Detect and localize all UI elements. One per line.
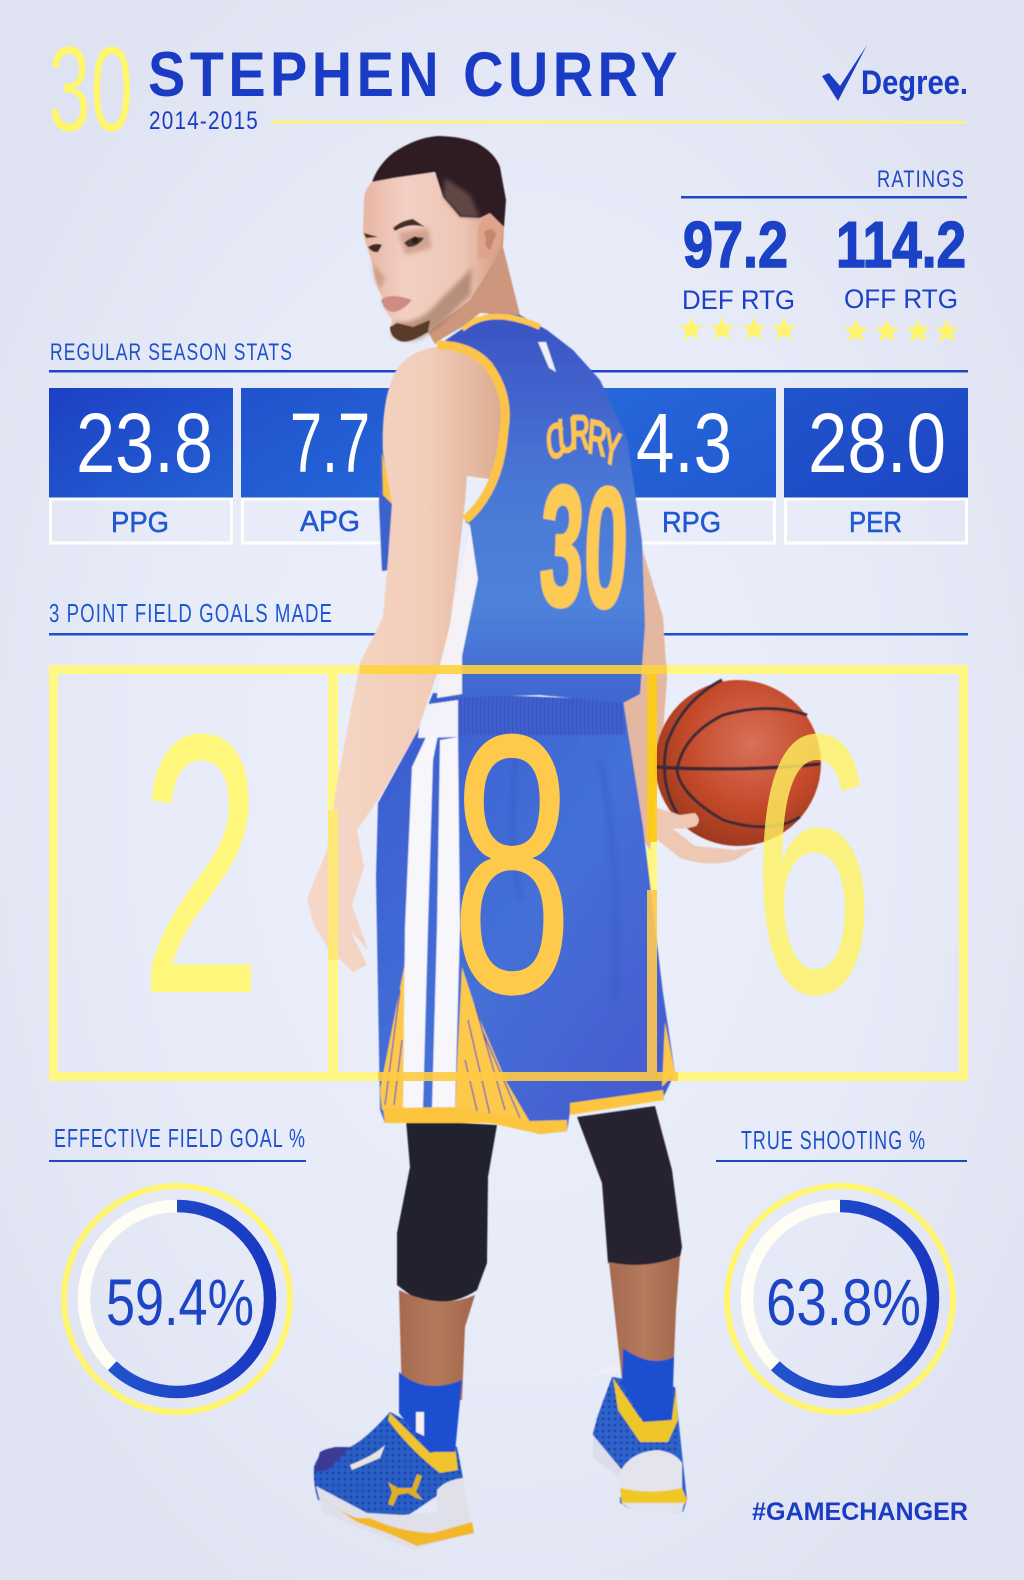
panel: ratings (679, 166, 967, 342)
stat: PPG (49, 388, 233, 543)
front shoe (314, 1412, 474, 1550)
lips (381, 296, 412, 312)
jersey number 30: 30 (48, 21, 133, 157)
title block (51, 46, 966, 132)
panel: regular season stats (49, 339, 968, 543)
player photo illustration (307, 136, 821, 1550)
hand on ball (655, 808, 757, 864)
ear (478, 213, 503, 260)
stat: APG: APG (300, 506, 360, 538)
front calf (399, 1290, 475, 1400)
logo: Degree (822, 45, 968, 102)
value: 59.4% (106, 1265, 254, 1339)
icon: league logo (538, 342, 556, 372)
head (363, 136, 506, 342)
ring chart (64, 1186, 290, 1412)
back sock (622, 1348, 674, 1422)
stat: PPG: PPG (111, 507, 169, 539)
hair (372, 136, 506, 227)
heading: TRUE SHOOTING % (741, 1125, 926, 1155)
stat: RPG: 4.3 (636, 396, 732, 490)
jaw stubble (392, 268, 472, 341)
panel: 3 point field goals made (49, 598, 968, 1081)
stat: PPG: 23.8 (76, 396, 213, 490)
armhole trim (437, 345, 505, 520)
ratings heading: RATINGS (877, 166, 965, 193)
jersey (379, 311, 645, 703)
panel: effective field goal (49, 1123, 306, 1412)
section heading: 3 POINT FIELD GOALS MADE (49, 598, 333, 628)
player name: STEPHEN CURRY (148, 40, 682, 110)
stat: RPG (592, 388, 776, 543)
defensive stars (679, 317, 796, 340)
defensive rating label: DEF RTG (682, 285, 795, 315)
arm (307, 347, 508, 972)
stat: PER (784, 388, 968, 543)
frame overlap on player (328, 665, 678, 1081)
heading: EFFECTIVE FIELD GOAL % (54, 1123, 306, 1153)
neck (428, 247, 520, 344)
cheek shading (372, 228, 432, 290)
ring chart (727, 1186, 953, 1412)
back arm (620, 541, 667, 850)
defensive rating value: 97.2 (683, 208, 788, 281)
face (363, 170, 504, 340)
back leg tights (577, 1106, 682, 1265)
scoreboard frame (49, 665, 968, 1081)
offensive rating label: OFF RTG (844, 284, 958, 314)
hashtag: #GAMECHANGER (752, 1498, 968, 1526)
value: 63.8% (766, 1265, 921, 1339)
front leg tights (397, 1120, 497, 1302)
chin beard (390, 320, 430, 342)
stat: APG (241, 388, 425, 543)
shorts (376, 693, 675, 1134)
basketball (655, 680, 821, 846)
section heading: REGULAR SEASON STATS (50, 339, 293, 366)
jersey name: CURRY (543, 404, 624, 480)
back calf (609, 1256, 680, 1380)
season: 2014-2015 (149, 107, 259, 135)
fade at temple (443, 178, 480, 218)
brows and eyes (364, 219, 425, 238)
digit 6: 6 (752, 658, 874, 1071)
front sock (399, 1372, 462, 1452)
header rule (271, 121, 966, 124)
stat: PER: PER (849, 507, 902, 539)
jersey: 30 (537, 450, 631, 645)
offensive stars (844, 319, 959, 342)
digit 2: 2 (140, 658, 262, 1071)
stat: APG: 7.7 (290, 396, 370, 490)
icon: shoe logo (388, 1474, 423, 1506)
digit 8: 8 (451, 658, 573, 1071)
offensive rating value: 114.2 (836, 208, 966, 281)
stat: PER: 28.0 (808, 396, 946, 490)
panel: true shooting (716, 1125, 967, 1412)
back shoe (585, 1365, 687, 1514)
logo: Degree: Degree. (861, 64, 968, 102)
stat: RPG: RPG (662, 507, 721, 539)
